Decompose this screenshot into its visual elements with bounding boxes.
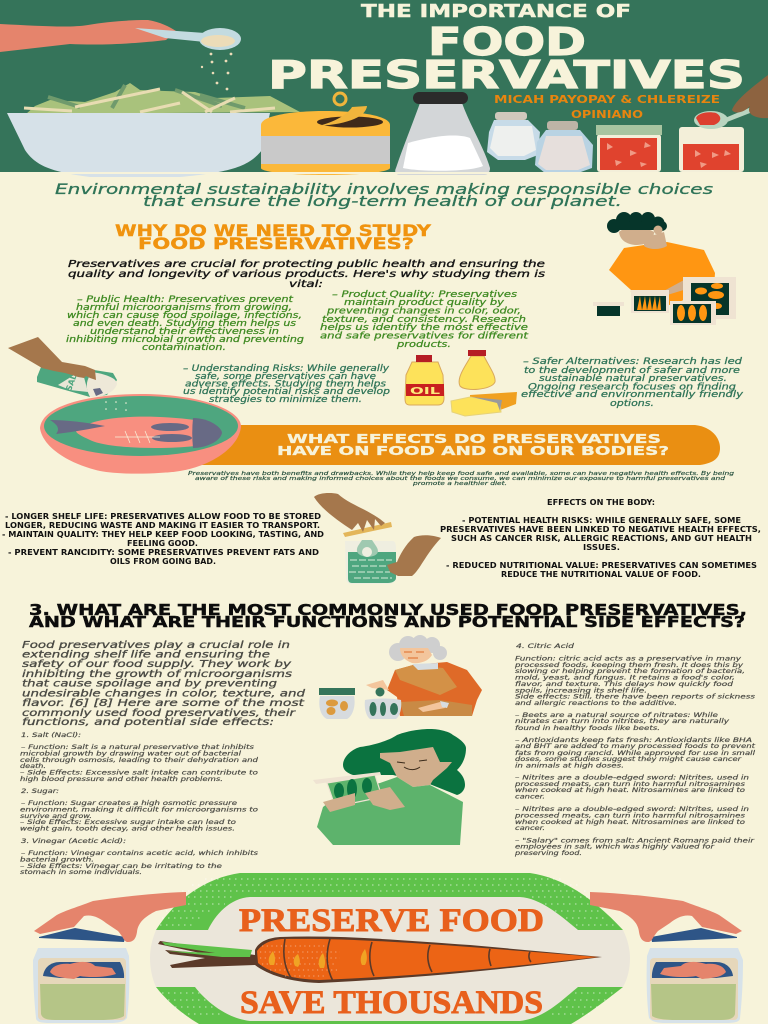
icon: woman holding jar [313, 729, 466, 845]
title: THE IMPORTANCE OF [361, 2, 631, 22]
text: safer alternatives: options. [610, 399, 654, 409]
text: public health: harmful microorganisms from growing, [76, 303, 292, 313]
text: salt, sugar, vinegar: – Side Effects: Excessive sugar intake can lead to [20, 818, 236, 826]
title: PRESERVATIVES [268, 53, 745, 97]
text: product quality: products. [396, 340, 451, 350]
text: citric acid and facts [514, 642, 756, 857]
text: effects summary: Preservatives have both benefits and drawbacks. While they help keep food safe and available, some can have negative health effects. By being [188, 471, 735, 477]
text: safer alternatives: effective and environmentally friendly [521, 390, 744, 400]
text: safer alternatives [521, 357, 744, 409]
left hand with lid [34, 892, 186, 942]
text: effects on the body: - POTENTIAL HEALTH RISKS: WHILE GENERALLY SAFE, SOME [462, 516, 741, 525]
text: citric acid and facts: cancer. [515, 825, 545, 832]
text: effects on food: FEELING GOOD. [127, 539, 198, 548]
text: citric acid and facts: Function: citric acid acts as a preservative in many [515, 654, 741, 662]
text: section 3 intro: flavor. [6] [8] Here are some of the most [22, 698, 305, 709]
icon: oil and butter [405, 350, 517, 416]
text: citric acid and facts: spoils, increasing its shelf life. [515, 686, 647, 694]
text: effects on food [2, 512, 325, 566]
text: effects on the body: - REDUCED NUTRITIONAL VALUE: PRESERVATIVES CAN SOMETIMES [446, 561, 757, 570]
text: understanding risks [183, 364, 391, 405]
text: salt, sugar, vinegar: stomach in some individuals. [20, 868, 142, 876]
text: citric acid and facts: processed foods, keeping them fresh. It does this by [514, 661, 743, 669]
text: why study intro: Preservatives are crucial for protecting public health and ensuring the [68, 259, 545, 270]
icon: hand and jar right [590, 892, 743, 1023]
text: salt, sugar, vinegar: environment, making it difficult for microorganisms to [20, 806, 258, 814]
heading: section 3: 3. WHAT ARE THE MOST COMMONLY USED FOOD PRESERVATIVES, [29, 601, 747, 619]
text: citric acid and facts: preserving food. [514, 850, 582, 857]
heading: section 3: AND WHAT ARE THEIR FUNCTIONS AND POTENTIAL SIDE EFFECTS? [29, 613, 745, 631]
text: public health: and even death. Studying them helps us [73, 319, 297, 329]
text: salt, sugar, vinegar: high blood pressure and other health problems. [20, 775, 223, 783]
title: FOOD [428, 20, 586, 64]
badge subheading: SAVE THOUSANDS [240, 985, 543, 1021]
text: citric acid and facts: flavor, and texture. This delays how quickly food [515, 680, 734, 688]
text: effects on the body: EFFECTS ON THE BODY: [547, 498, 655, 507]
text: section 3 intro [22, 640, 306, 728]
text: citric acid and facts: – Nitrites are a double-edged sword: Nitrites, used in [515, 774, 749, 782]
text: product quality: texture, and consistency. Research [322, 315, 526, 325]
text: salt, sugar, vinegar: death. [20, 762, 46, 770]
text: understanding risks: us identify potential risks and develop [183, 387, 391, 397]
text: safer alternatives: sustainable natural preservatives. [539, 374, 727, 384]
icon: person packing preserves [593, 212, 736, 325]
text: effects on the body: REDUCE THE NUTRITIONAL VALUE OF FOOD. [501, 570, 701, 579]
icon: fish on a plate [40, 394, 241, 474]
text: product quality: preventing changes in color, odor, [326, 306, 521, 316]
icon: salt shaker [395, 92, 490, 175]
text: salt, sugar, vinegar: – Function: Sugar creates a high osmotic pressure [21, 799, 237, 807]
text: citric acid and facts: when cooked at high heat. Nitrosamines are linked to [515, 818, 745, 826]
text: salt, sugar, vinegar: cells through osmosis, leading to their dehydration and [20, 756, 259, 764]
text: product quality: – Product Quality: Preservatives [332, 290, 518, 300]
text: understanding risks: safe, some preservatives can have [195, 372, 376, 382]
text: effects on food: - LONGER SHELF LIFE: PRESERVATIVES ALLOW FOOD TO BE STORED [5, 512, 322, 521]
heading: effects: WHAT EFFECTS DO PRESERVATIVES [287, 432, 661, 447]
text: section 3 intro: functions, and potential side effects: [22, 717, 274, 728]
text: public health: contamination. [142, 343, 226, 353]
text: section 3 intro: commonly used food preservatives, their [22, 708, 296, 719]
text: citric acid and facts: fats from going rancid. While approved for use in small [515, 749, 755, 757]
text: effects summary [188, 471, 735, 487]
text: product quality: and safe preservatives for different [320, 332, 529, 342]
heading: why study: FOOD PRESERVATIVES? [138, 234, 414, 253]
left jar [33, 948, 129, 1023]
text: citric acid and facts: and allergic reactions to the additive. [515, 699, 677, 707]
text: citric acid and facts: employees in salt, which was highly valued for [515, 842, 715, 850]
text: product quality: maintain product quality by [344, 298, 505, 308]
badge: preserve food [150, 873, 630, 1024]
text: effects summary: promote a healthier diet. [412, 481, 507, 487]
heading: why study [115, 221, 431, 253]
text: salt, sugar, vinegar: 2. Sugar: [21, 788, 59, 795]
text: citric acid and facts: – Beets are a natural source of nitrates: While [515, 711, 718, 719]
text: salt, sugar, vinegar: bacterial growth. [20, 856, 94, 864]
text: citric acid and facts: nitrates can turn into nitrites, they are naturally [515, 717, 729, 725]
text: section 3 intro: undesirable changes in color, texture, and [22, 688, 306, 700]
text: citric acid and facts: in animals at high doses. [515, 762, 624, 770]
text: understanding risks: – Understanding Risks: While generally [183, 364, 390, 374]
text: effects on the body: ISSUES. [583, 543, 620, 552]
text: effects on food: LONGER, REDUCING WASTE AND MAKING IT EASIER TO TRANSPORT. [5, 521, 320, 530]
text: citric acid and facts: 4. Citric Acid [516, 642, 575, 650]
icon: hands sealing jar [314, 493, 441, 584]
text: citric acid and facts: cancer. [515, 794, 545, 800]
icon: second jar with spoon [679, 75, 768, 172]
header banner [0, 0, 768, 177]
text: section 3 intro: extending shelf life and ensuring the [22, 650, 270, 660]
text: why study intro: quality and longevity of various products. Here's why studying them is [68, 269, 545, 280]
text: salt, sugar, vinegar: microbial growth by drawing water out of bacterial [20, 750, 241, 758]
authors: MICAH PAYOPAY & CHLEREIZE [494, 94, 720, 106]
text: section 3 intro: that cause spoilage and by preventing [22, 678, 277, 690]
text: salt, sugar, vinegar: – Side Effects: Excessive salt intake can contribute to [20, 768, 258, 776]
text: safer alternatives: Ongoing research focuses on finding [528, 382, 737, 392]
icon: hand and jar left [33, 892, 186, 1023]
text: section 3 intro: inhibiting the growth of microorganisms [22, 669, 292, 680]
text: citric acid and facts: processed meats, can turn into harmful nitrosamines [514, 812, 746, 820]
intro statement: Environmental sustainability involves making responsible choices [55, 182, 714, 198]
text: salt, sugar, vinegar: weight gain, tooth decay, and other health issues. [20, 824, 235, 832]
text: public health [66, 295, 305, 353]
text: salt, sugar, vinegar: – Function: Salt is a natural preservative that inhibits [21, 743, 255, 751]
text: salt, sugar, vinegar: – Function: Vinegar contains acetic acid, which inhibits [21, 849, 259, 857]
text: citric acid and facts: and BHT are added to many processed foods to prevent [515, 742, 756, 750]
text: citric acid and facts: – Antioxidants keep fats fresh: Antioxidants like BHA [515, 736, 752, 744]
text: effects summary: aware of these risks and making informed choices about the foods we consume, we can minimize our exposure to harmful preservatives and [195, 476, 726, 482]
text: public health: – Public Health: Preservatives prevent [77, 295, 294, 305]
text: salt, sugar, vinegar: 3. Vinegar (Acetic Acid): [21, 837, 126, 845]
heading: effects [277, 432, 669, 459]
text: citric acid and facts: – "Salary" comes from salt: Ancient Romans paid their [515, 836, 755, 844]
text: understanding risks: adverse effects. Studying them helps [185, 380, 387, 390]
authors: OPINIANO [571, 109, 643, 121]
badge heading: PRESERVE FOOD [239, 903, 544, 939]
text: public health: inhibiting microbial growth and preventing [66, 335, 305, 345]
text: why study intro [68, 259, 545, 290]
text: safer alternatives: to the development of safer and more [524, 366, 740, 376]
text: safer alternatives: – Safer Alternatives: Research has led [523, 357, 743, 367]
icon: salad bowl [7, 83, 300, 177]
icon: hand with measuring spoon [0, 20, 241, 90]
heading: effects: HAVE ON FOOD AND ON OUR BODIES? [277, 444, 669, 459]
text: effects on food: - MAINTAIN QUALITY: THEY HELP KEEP FOOD LOOKING, TASTING, AND [2, 530, 325, 539]
icon: carrot [158, 937, 602, 983]
text: citric acid and facts: doses, some studies suggest they might cause cancer [515, 755, 742, 763]
text: product quality: helps us identify the most effective [320, 323, 528, 333]
text: citric acid and facts: when cooked at high heat. Nitrosamines are linked to [515, 786, 745, 794]
text: citric acid and facts: mold, yeast, and fungus. It retains a food's color, [515, 674, 735, 682]
icon: glass shakers [487, 112, 593, 173]
text: product quality [320, 290, 529, 350]
icon: hand shaking salt [8, 337, 117, 397]
icon: hand shaking salt: SALT [64, 369, 80, 392]
text: citric acid and facts: slowing or helping prevent the formation of bacteria, [515, 667, 745, 675]
text: salt, sugar, vinegar: – Side Effects: Vinegar can be irritating to the [20, 862, 222, 870]
text: effects on the body: SUCH AS CANCER RISK, ALLERGIC REACTIONS, AND GUT HEALTH [451, 534, 752, 543]
text: salt, sugar, vinegar: 1. Salt (NaCl): [21, 731, 81, 739]
text: public health: understand their effectiveness in [90, 327, 279, 337]
text: salt, sugar, vinegar [20, 731, 259, 876]
text: effects on the body: PRESERVATIVES HAVE BEEN LINKED TO NEGATIVE HEALTH EFFECTS, [440, 525, 761, 534]
text: citric acid and facts: found in healthy foods like beets. [515, 724, 660, 732]
text: citric acid and facts: Side effects: Still, there have been reports of sickness [515, 692, 756, 700]
text: understanding risks: strategies to minimize them. [209, 395, 362, 405]
title [268, 2, 745, 97]
text: citric acid and facts: processed meats, can turn into harmful nitrosamines [514, 780, 746, 788]
text: effects on food: - PREVENT RANCIDITY: SOME PRESERVATIVES PREVENT FATS AND [8, 548, 320, 557]
heading: why study: WHY DO WE NEED TO STUDY [115, 221, 431, 240]
text: salt, sugar, vinegar: survive and grow. [20, 813, 92, 820]
heading: section 3 [29, 601, 747, 631]
text: section 3 intro: safety of our food supply. They work by [22, 659, 292, 670]
icon: oil and butter: OIL [410, 386, 441, 397]
intro statement: that ensure the long-term health of our planet. [143, 194, 622, 210]
text: effects on food: OILS FROM GOING BAD. [110, 557, 216, 566]
icon: open tin can [261, 93, 390, 175]
text: why study intro: vital: [289, 279, 323, 290]
text: public health: which can cause food spoilage, infections, [67, 311, 302, 321]
authors [494, 94, 720, 121]
icon: jar of preserves [596, 125, 662, 172]
text: section 3 intro: Food preservatives play a crucial role in [22, 640, 290, 651]
text: citric acid and facts: – Nitrites are a double-edged sword: Nitrites, used in [515, 805, 749, 813]
text: effects on the body [440, 498, 761, 579]
intro statement [55, 182, 714, 210]
orange banner [200, 425, 720, 465]
icon: grandmother with jars [319, 635, 482, 719]
